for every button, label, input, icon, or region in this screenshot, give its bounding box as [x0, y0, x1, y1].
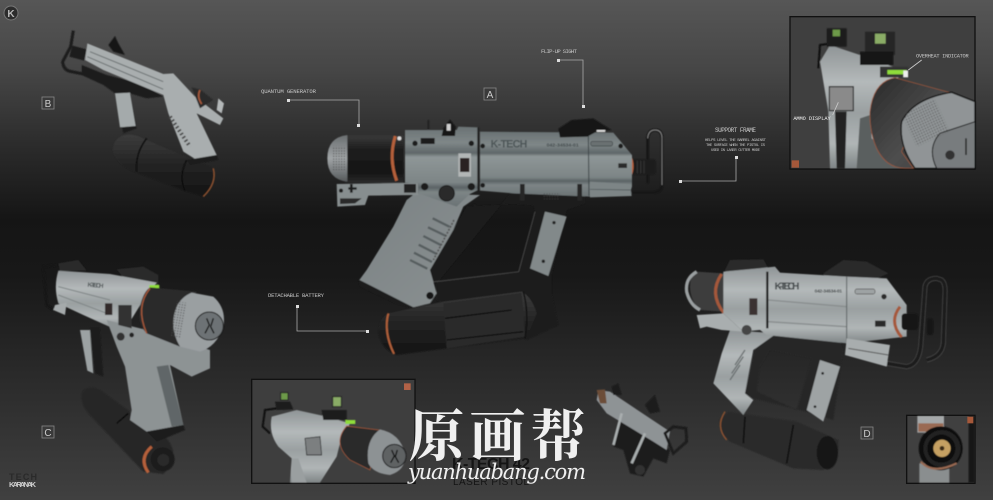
rear rail: [337, 183, 418, 207]
view label D: D: [863, 429, 871, 440]
barrel: [480, 132, 632, 197]
C body: [56, 271, 157, 330]
inset: overheat indicator: AMMO DISPLAY: [793, 116, 831, 122]
view label B: B: [45, 99, 52, 110]
view label C: C: [44, 428, 52, 439]
watermark: yuanhuabang.com: [407, 460, 586, 484]
callout: support frame: [679, 127, 767, 183]
inset: overheat indicator: OVERHEAT INDICATOR: [916, 54, 969, 60]
view label D: [861, 427, 873, 440]
body: [723, 267, 907, 343]
battery: [378, 292, 537, 355]
logo: K badge: [4, 6, 18, 20]
title behind watermark: K-TECH 42: [452, 456, 530, 473]
view D pistol: [686, 259, 945, 470]
view label A: A: [487, 90, 494, 101]
view label A: [484, 88, 496, 101]
callout: flip-up sight: FLIP-UP SIGHT: [541, 48, 578, 55]
callout: support frame: USED IN LASER CUTTER MODE: [711, 149, 761, 153]
grip: [359, 193, 480, 307]
callout: quantum generator: [261, 88, 360, 127]
B battery: [113, 135, 215, 197]
view D pistol: 042-34534-01: [815, 288, 842, 293]
view C pistol: K-TECH: [87, 282, 104, 290]
receiver details: [412, 141, 418, 146]
rear cylinder: [345, 136, 403, 182]
logo: K badge: K: [7, 9, 15, 20]
muzzle: [895, 307, 902, 337]
logo: Tech Karanak: KARANAK: [9, 480, 37, 489]
main pistol view A: [327, 118, 662, 355]
inset: overheat indicator: [790, 17, 975, 169]
title behind watermark: [452, 456, 530, 488]
support frame: [632, 130, 662, 192]
inset: front three quarter view: [252, 379, 415, 483]
trigger: [473, 204, 479, 225]
brand text on barrel: K-TECH: [491, 138, 527, 150]
flip-up sight: [558, 118, 612, 137]
view D pistol: K-TECH: [775, 281, 799, 292]
logo: Tech Karanak: [9, 472, 37, 489]
support frame: [887, 278, 945, 367]
logo: Tech Karanak: TECH: [9, 472, 37, 482]
B frame: [82, 65, 163, 133]
sights: [725, 259, 768, 280]
view label B: [42, 97, 54, 110]
view C pistol: [43, 260, 224, 474]
lower frame: [426, 192, 585, 340]
callout: support frame: SUPPORT FRAME: [715, 127, 756, 134]
title behind watermark: LASER PISTOL: [453, 477, 529, 488]
callout: quantum generator: QUANTUM GENERATOR: [261, 88, 317, 95]
inset: muzzle detail: [907, 415, 975, 483]
grip: [713, 330, 777, 415]
lower rail: [590, 182, 632, 197]
rear sight: [442, 119, 456, 136]
lower rail: [845, 338, 890, 367]
callout: flip-up sight: [541, 48, 585, 108]
callout: support frame: THE SURFACE WHEN THE PISTOL IS: [706, 144, 766, 148]
watermark: 原画帮: [408, 393, 592, 473]
main pistol view A: 042-34534-01: [547, 143, 579, 149]
callout: support frame: HELPS LEVEL THE BARREL AGAINST: [705, 139, 767, 143]
view label C: [42, 426, 54, 439]
callout: detachable battery: [268, 292, 369, 333]
grey plate: [530, 212, 567, 276]
receiver: [405, 127, 478, 207]
view B pistol: [63, 31, 224, 197]
small rear view pistol: [597, 383, 687, 477]
plate: [807, 360, 840, 422]
grip ribs: [410, 218, 449, 269]
muzzle: [632, 159, 656, 175]
C battery: [81, 387, 173, 474]
rear cylinder: [690, 272, 723, 312]
lower frame: [745, 333, 843, 420]
callout: detachable battery: DETACHABLE BATTERY: [268, 292, 325, 299]
battery: [719, 412, 838, 470]
